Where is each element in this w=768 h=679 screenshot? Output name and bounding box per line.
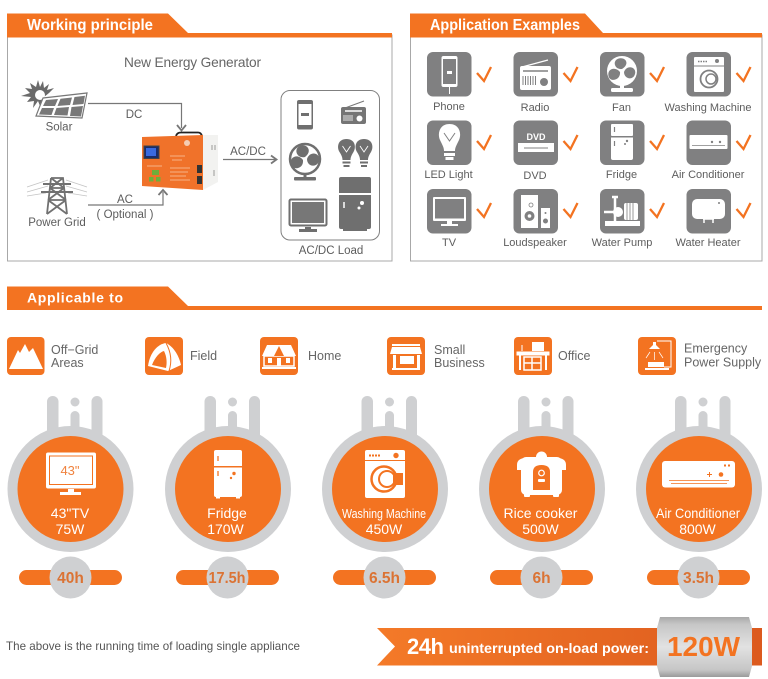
arrow: DC (88, 104, 186, 130)
item: DVD: DVD (526, 132, 546, 142)
item: phone: Phone (433, 101, 465, 113)
panel: AC/DC load (281, 90, 380, 240)
item: air conditioner: Air Conditioner (672, 169, 745, 181)
load: fan (290, 144, 320, 180)
appliance: TV: 43"TV (51, 505, 90, 521)
icon: solar panel (21, 80, 87, 118)
item: fridge (600, 120, 664, 181)
load: phone (297, 100, 313, 130)
runtime pill: 6.5h (369, 570, 400, 587)
power value (657, 617, 752, 677)
label: AC/DC: AC/DC (230, 146, 266, 158)
scenario: off-grid areas: Off−Grid (51, 343, 98, 357)
banner: uninterrupted power (377, 617, 762, 677)
appliance: TV: 75W (56, 521, 85, 537)
icon: TV 43 (46, 452, 96, 495)
item: water heater (675, 189, 750, 249)
runtime pill: 6h (532, 570, 551, 587)
panel: application examples (410, 14, 762, 261)
item: washing machine: Washing Machine (664, 102, 752, 114)
banner: uninterrupted power: 24h (407, 634, 444, 659)
runtime pill (647, 556, 750, 598)
heading: applicable to: Applicable to (27, 290, 123, 306)
panel: working principle (7, 14, 392, 261)
appliance: rice cooker: Rice cooker (504, 505, 578, 521)
antenna (675, 396, 730, 446)
scenario: emergency power supply: Power Supply (684, 356, 762, 370)
label: AC: AC (117, 194, 133, 206)
item: fan (600, 52, 664, 114)
label: optional: ( Optional ) (97, 209, 154, 221)
scenario: small business: Business (434, 356, 485, 370)
appliance: washing machine: 450W (366, 521, 403, 537)
icon: rice cooker (517, 452, 566, 497)
antenna (204, 396, 260, 446)
runtime pill: 17.5h (208, 570, 246, 587)
scenario: field: Field (190, 349, 217, 363)
heading: applicable to (7, 286, 762, 310)
runtime pill: 40h (57, 570, 84, 587)
scenario: home (260, 337, 341, 375)
item: water pump (592, 189, 664, 249)
antenna (362, 396, 417, 446)
label: DC: DC (126, 109, 142, 121)
appliance: air conditioner: 800W (679, 521, 717, 537)
diagram title: New Energy Generator (124, 55, 261, 70)
item: DVD (514, 120, 578, 182)
appliance: fridge (165, 396, 291, 598)
scenario: emergency power supply: Emergency (684, 342, 748, 356)
generator device (142, 132, 218, 190)
item: fan: Fan (612, 102, 631, 114)
item: LED light (424, 120, 491, 181)
heading: working principle (7, 14, 392, 38)
icon: washing machine (365, 450, 405, 498)
item: air conditioner (672, 120, 750, 181)
item: TV (427, 189, 491, 249)
item: radio: Radio (521, 102, 549, 114)
scenario: emergency power supply (638, 337, 762, 375)
antenna (518, 396, 574, 446)
label: AC/DC load: AC/DC Load (299, 245, 363, 257)
banner: uninterrupted power: uninterrupted on-load power: (449, 640, 649, 656)
runtime pill (333, 556, 436, 598)
appliance: TV (8, 396, 134, 598)
appliance: air conditioner: Air Conditioner (656, 505, 740, 521)
appliance: fridge: 170W (207, 521, 245, 537)
heading: working principle: Working principle (27, 17, 153, 34)
label: power grid: Power Grid (28, 217, 86, 229)
appliance: rice cooker (479, 396, 605, 598)
runtime pill: 3.5h (683, 570, 714, 587)
appliance: washing machine: Washing Machine (342, 507, 426, 521)
item: washing machine (664, 52, 752, 114)
appliance: air conditioner (636, 396, 762, 598)
icon: air conditioner (662, 461, 735, 488)
label: solar: Solar (46, 122, 73, 134)
load: light bulbs (338, 139, 372, 167)
item: water pump: Water Pump (592, 237, 652, 249)
arrow: AC (88, 190, 168, 205)
runtime pill (176, 556, 279, 598)
appliance: rice cooker: 500W (522, 521, 560, 537)
appliance: washing machine (322, 396, 448, 598)
item: radio (514, 52, 578, 114)
item: TV: TV (442, 237, 457, 249)
item: DVD: DVD (523, 170, 547, 182)
heading: application examples: Application Examples (430, 17, 580, 34)
icon: fridge (214, 450, 242, 498)
antenna (47, 396, 102, 446)
item: loudspeaker (503, 189, 578, 249)
item: fridge: Fridge (606, 169, 637, 181)
item: water heater: Water Heater (675, 237, 741, 249)
scenario: small business: Small (434, 343, 465, 357)
power value: 120W (667, 631, 741, 662)
item: LED light: LED Light (424, 169, 473, 181)
scenario: off-grid areas (7, 337, 98, 375)
runtime pill (19, 556, 122, 598)
icon: TV 43: 43" (60, 463, 80, 478)
footnote: The above is the running time of loading single appliance (6, 640, 300, 653)
item: phone (427, 52, 491, 113)
runtime pill (490, 556, 593, 598)
scenario: field (145, 337, 217, 375)
scenario: office (514, 337, 590, 375)
icon: power grid tower (27, 178, 87, 214)
heading: application examples (410, 14, 762, 38)
load: fridge (339, 177, 371, 231)
load: radio (341, 101, 366, 124)
item: loudspeaker: Loudspeaker (503, 237, 567, 249)
scenario: small business (387, 337, 485, 375)
scenario: office: Office (558, 349, 590, 363)
arrow: AC/DC output (223, 156, 276, 164)
scenario: home: Home (308, 349, 341, 363)
scenario: off-grid areas: Areas (51, 356, 84, 370)
load: TV (290, 200, 326, 232)
appliance: fridge: Fridge (207, 505, 247, 521)
